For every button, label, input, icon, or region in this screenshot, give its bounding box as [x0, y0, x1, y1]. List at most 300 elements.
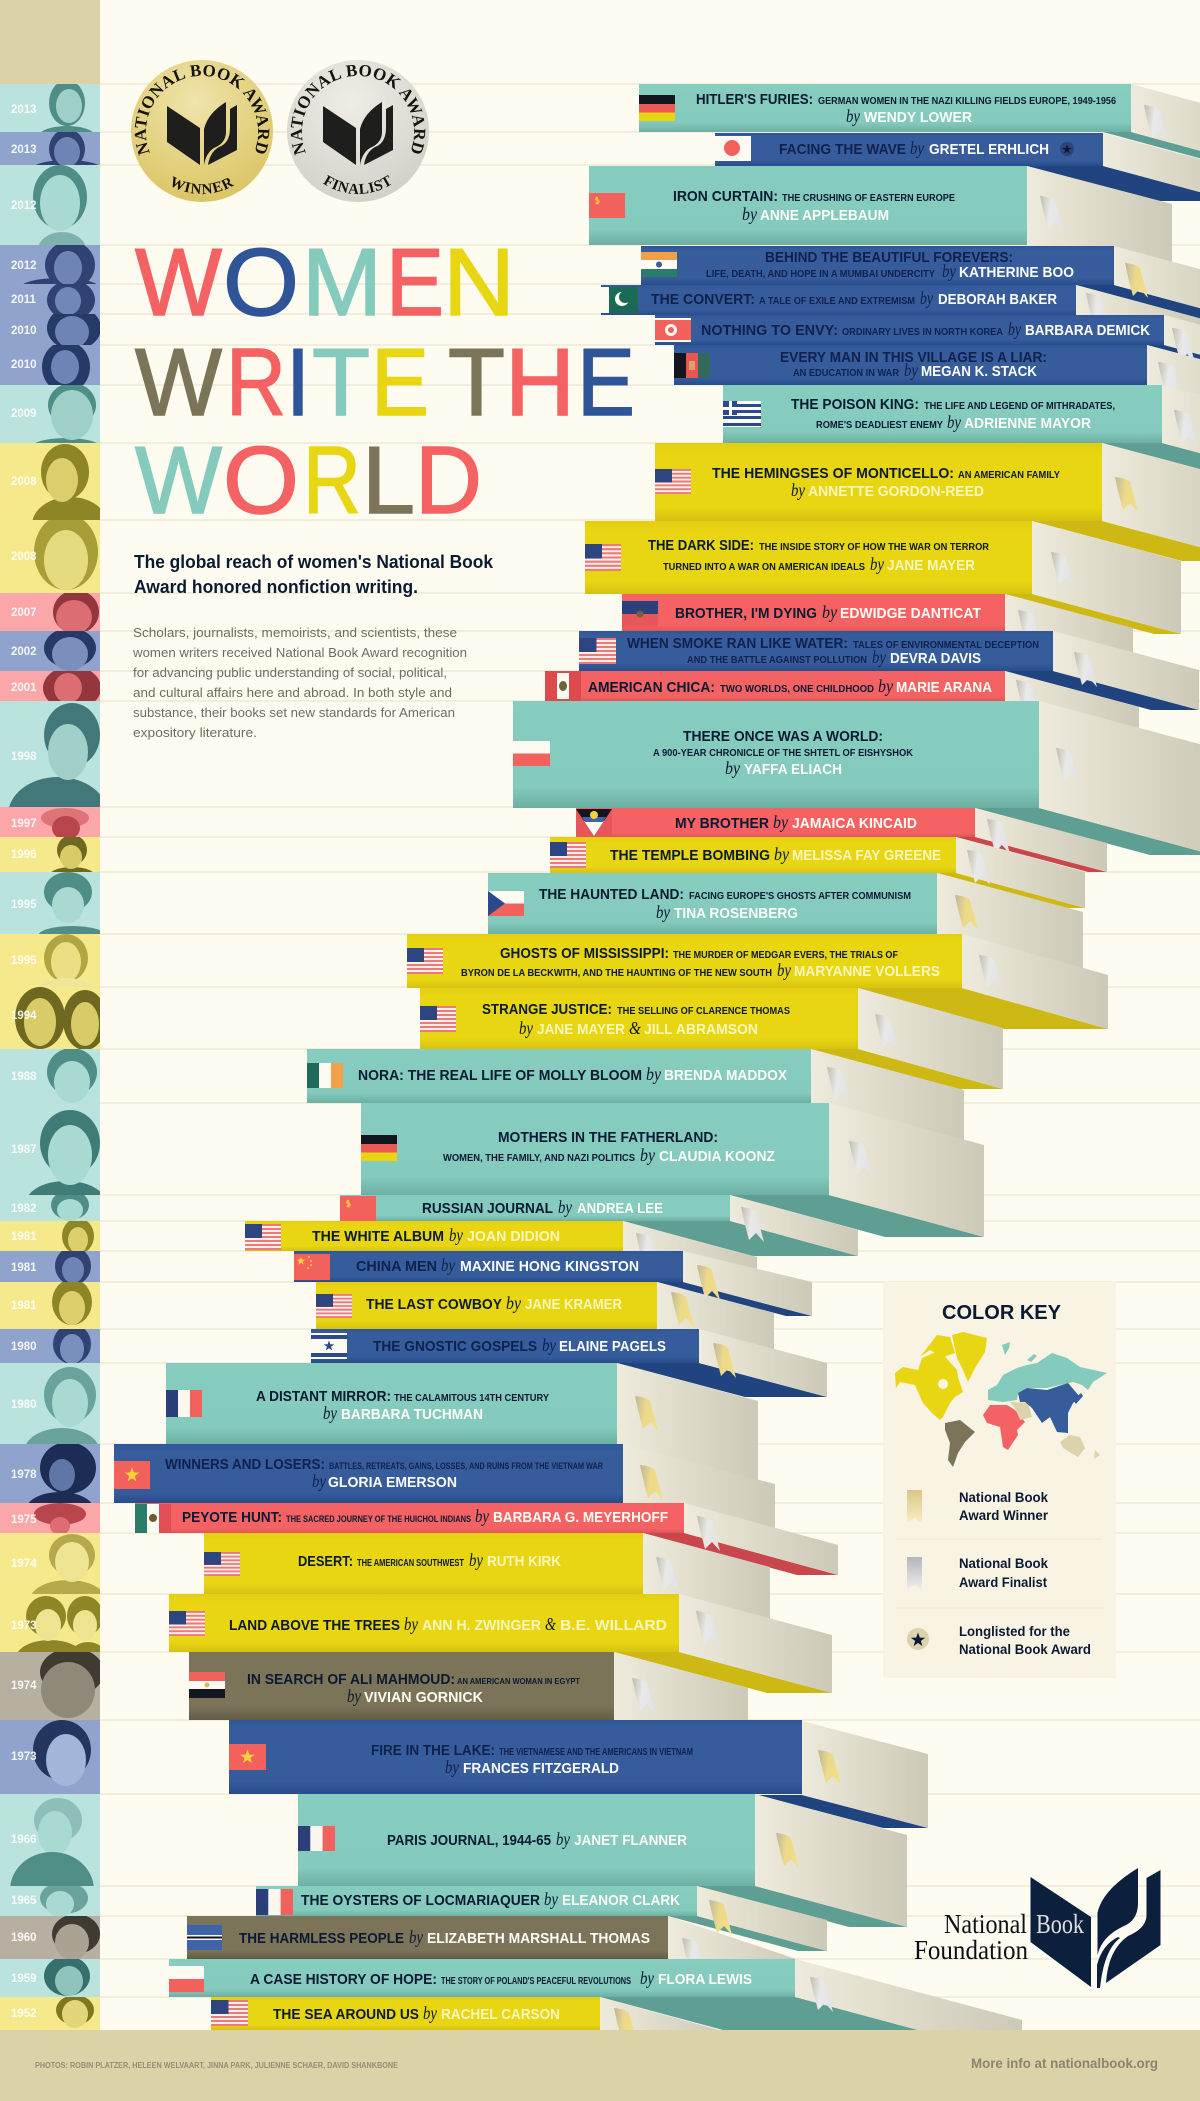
spine text: by — [774, 844, 789, 864]
book: In Search of Ali Mahmoud — [189, 1652, 748, 1756]
flag: USA — [585, 544, 621, 571]
flag: USA — [316, 1294, 352, 1318]
spine text: BYRON DE LA BECKWITH, AND THE HAUNTING OF THE NEW SOUTH — [461, 967, 772, 979]
spine text: B.E. WILLARD — [560, 1617, 667, 1634]
spine text — [239, 1927, 650, 1947]
spine text: THE LIFE AND LEGEND OF MITHRADATES, — [924, 400, 1115, 412]
intro paragraph: substance, their books set new standards for American — [133, 705, 455, 720]
spine text: by — [449, 1225, 463, 1245]
year labels: 1995 — [11, 899, 37, 911]
flag: Afghanistan — [674, 353, 710, 378]
title: Women Write the World: N — [443, 229, 515, 336]
intro paragraph: and cultural affairs here and abroad. In both style and — [133, 685, 452, 700]
flag: Mexico — [135, 1504, 171, 1533]
spine text: THE DARK SIDE: — [648, 537, 754, 554]
logo wordmark: National — [944, 1909, 1027, 1939]
year labels: 2008 — [11, 476, 37, 488]
year labels: 2012 — [11, 200, 37, 212]
spine text: JAMAICA KINCAID — [792, 815, 917, 832]
book: The Temple Bombing — [550, 837, 1085, 908]
spine text: by — [469, 1550, 483, 1570]
spine text: by — [920, 288, 933, 308]
spine text: WENDY LOWER — [864, 109, 972, 126]
flag: USA — [420, 1006, 456, 1032]
book: Peyote Hunt — [135, 1503, 838, 1575]
spine text: JANE MAYER — [887, 557, 975, 574]
portrait row: 1996 Melissa Fay Greene — [0, 837, 100, 872]
spine text: AND THE BATTLE AGAINST POLLUTION — [687, 654, 867, 666]
spine text — [780, 349, 1047, 380]
spine text: TINA ROSENBERG — [674, 905, 798, 922]
flag: Israel — [311, 1333, 347, 1359]
year labels: 1973 — [11, 1751, 37, 1763]
spine text: BARBARA TUCHMAN — [341, 1406, 483, 1423]
year labels: 1978 — [11, 1469, 37, 1481]
spine text: by — [640, 1145, 655, 1165]
flag: France — [256, 1889, 293, 1915]
book: The Convert — [601, 285, 1200, 350]
spine text: by — [822, 602, 837, 622]
spine text: RUSSIAN JOURNAL — [422, 1200, 553, 1217]
spine text: ORDINARY LIVES IN NORTH KOREA — [842, 326, 1003, 338]
book: Paris Journal — [298, 1794, 907, 1927]
spine text: FRANCES FITZGERALD — [463, 1760, 619, 1777]
spine text: THE SELLING OF CLARENCE THOMAS — [617, 1005, 790, 1017]
spine text: THE SEA AROUND US — [273, 2006, 419, 2023]
flag: Pakistan — [601, 287, 638, 313]
year labels — [11, 104, 37, 2020]
year labels: 1973 — [11, 1620, 37, 1632]
book: Strange Justice — [420, 988, 1003, 1089]
logo: National Book Foundation — [914, 1868, 1160, 1988]
portrait row: 1995 Tina Rosenberg — [0, 872, 100, 934]
book: Land Above the Trees — [169, 1594, 832, 1693]
spine text — [648, 537, 989, 574]
spine text: GLORIA EMERSON — [328, 1474, 457, 1491]
portrait row: 2013 Wendy Lower — [0, 84, 100, 132]
book: Nora — [307, 1049, 964, 1144]
spine text — [627, 635, 1039, 667]
title: Women Write the World: E — [577, 329, 635, 436]
key: finalist label: National Book — [959, 1556, 1048, 1571]
spine text: YAFFA ELIACH — [744, 761, 842, 778]
spine text: by — [404, 1614, 418, 1634]
spine text — [301, 1889, 680, 1909]
flag: USA — [245, 1224, 281, 1250]
portrait row: 2001 Marie Arana — [0, 671, 100, 701]
spine text: EDWIDGE DANTICAT — [840, 605, 981, 622]
spine text: DESERT: — [298, 1553, 353, 1570]
key: winner ribbon — [907, 1490, 922, 1523]
title: Women Write the World: W — [135, 427, 222, 534]
year labels: 1974 — [11, 1558, 37, 1570]
spine text: THE SACRED JOURNEY OF THE HUICHOL INDIANS — [286, 1514, 471, 1525]
spine text: THE CONVERT: — [651, 291, 755, 308]
spine text: KATHERINE BOO — [959, 264, 1074, 281]
spine text: JANET FLANNER — [574, 1832, 687, 1849]
flag: Czech Republic — [488, 891, 524, 916]
spine text: VIVIAN GORNICK — [364, 1689, 483, 1706]
portrait row: 2013 Gretel Ehrlich — [0, 132, 100, 165]
book: The Last Cowboy — [316, 1282, 774, 1360]
spine text: by — [441, 1255, 455, 1275]
spine text: MARIE ARANA — [896, 679, 992, 696]
spine text: by — [910, 138, 924, 158]
book: Winners and Losers — [114, 1444, 775, 1543]
portrait row: 1966 Janet Flanner — [0, 1794, 100, 1886]
title: Women Write the World: I — [286, 329, 310, 436]
book: The Haunted Land — [488, 873, 1083, 973]
book: China Men — [294, 1251, 812, 1316]
website link text: More info at nationalbook.org — [971, 2055, 1158, 2071]
spine text: by — [409, 1927, 423, 1947]
flag: USA — [550, 842, 586, 868]
book: American Chica — [545, 671, 1139, 737]
spine text: A DISTANT MIRROR: — [256, 1388, 391, 1405]
seal: National Book Award Winner: NATIONAL BOOK AWARD — [134, 65, 270, 156]
spine text: MARYANNE VOLLERS — [794, 963, 940, 980]
spine text: by — [791, 480, 805, 500]
world map — [895, 1332, 1107, 1467]
flag: Poland — [169, 1966, 204, 1992]
flag: USA — [579, 638, 616, 664]
book: The Gnostic Gospels — [311, 1329, 827, 1397]
spine text: RUTH KIRK — [487, 1553, 561, 1570]
year labels: 2010 — [11, 325, 37, 337]
flag: USSR — [340, 1196, 376, 1221]
year labels: 2013 — [11, 104, 37, 116]
spine text: by — [773, 812, 788, 832]
intro paragraph: expository literature. — [133, 725, 257, 740]
title: Women Write the World: W — [135, 229, 222, 336]
year labels: 1982 — [11, 1203, 37, 1215]
portrait row: 1974 Ruth Kirk — [0, 1533, 100, 1594]
spine text: THE GNOSTIC GOSPELS — [373, 1338, 537, 1355]
flag: North Korea — [655, 318, 691, 342]
flag: Botswana — [187, 1925, 222, 1950]
portrait row: 1994 Jane Mayer and Jill Abramson — [0, 987, 100, 1049]
spine text: GERMAN WOMEN IN THE NAZI KILLING FIELDS EUROPE, 1949-1956 — [818, 95, 1116, 107]
spine text: FIRE IN THE LAKE: — [371, 1742, 495, 1759]
subtitle: The global reach of women's National Book — [134, 552, 494, 572]
portrait row: 1981 Jane Kramer — [0, 1282, 100, 1329]
spine text — [673, 188, 955, 224]
spine text: GRETEL ERHLICH — [929, 141, 1049, 158]
flag: India — [641, 252, 677, 277]
intro paragraph: women writers received National Book Award recognition — [132, 645, 467, 660]
spine text — [358, 1064, 787, 1084]
spine text: MAXINE HONG KINGSTON — [460, 1258, 639, 1275]
spine text: THE HARMLESS PEOPLE — [239, 1930, 404, 1947]
book: Russian Journal — [340, 1195, 858, 1256]
spine text — [366, 1293, 622, 1313]
spine text: FLORA LEWIS — [658, 1971, 752, 1988]
portrait row: 2010 Megan Stack — [0, 345, 100, 385]
spine text — [539, 886, 911, 922]
flag: USA — [211, 2000, 248, 2026]
spine text — [356, 1255, 639, 1275]
spine text: BARBARA DEMICK — [1025, 322, 1150, 339]
spine text: RACHEL CARSON — [441, 2006, 560, 2023]
year labels: 1966 — [11, 1834, 37, 1846]
flag: France — [298, 1826, 335, 1851]
spine text — [701, 319, 1150, 339]
spine text: by — [656, 902, 670, 922]
portrait row: 1960 Elizabeth Marshall Thomas — [0, 1916, 100, 1959]
seal: National Book Award Finalist: FINALIST — [322, 174, 391, 194]
spine text: by — [347, 1686, 361, 1706]
year labels: 1974 — [11, 1680, 37, 1692]
spine text: by — [777, 960, 791, 980]
spine text: by — [640, 1968, 654, 1988]
flag: USA — [655, 469, 691, 494]
year labels: 1998 — [11, 751, 37, 763]
spine text: by — [742, 204, 757, 224]
year labels: 2010 — [11, 359, 37, 371]
spine text: THE TEMPLE BOMBING — [610, 847, 770, 864]
spine text: THE OYSTERS OF LOCMARIAQUER — [301, 1892, 540, 1909]
spine text: by — [1008, 319, 1021, 339]
spine text: LAND ABOVE THE TREES — [229, 1617, 400, 1634]
spine text: IRON CURTAIN: — [673, 188, 778, 205]
spine text: BATTLES, RETREATS, GAINS, LOSSES, AND RUINS FROM THE VIETNAM WAR — [329, 1461, 603, 1471]
spine text: DEVRA DAVIS — [890, 650, 981, 667]
book: Brother, I'm Dying — [622, 594, 1133, 665]
book: When Smoke Ran Like Water — [579, 631, 1199, 710]
spine text: by — [558, 1197, 572, 1217]
portrait row: 1988 Brenda Maddox — [0, 1049, 100, 1103]
book: The Dark Side — [585, 521, 1181, 634]
book: Hitler's Furies — [639, 84, 1200, 170]
spine text — [696, 91, 1116, 126]
year labels: 1995 — [11, 955, 37, 967]
spine text: ROME'S DEADLIEST ENEMY — [816, 419, 943, 431]
spine text: BEHIND THE BEAUTIFUL FOREVERS: — [765, 249, 1013, 266]
spine text — [791, 396, 1115, 432]
year labels: 1994 — [11, 1010, 37, 1022]
spine text: & — [545, 1614, 556, 1634]
book: Iron Curtain — [589, 166, 1172, 283]
spine text: IN SEARCH OF ALI MAHMOUD: — [247, 1671, 455, 1688]
book: The Harmless People — [187, 1916, 805, 2000]
spine text: LIFE, DEATH, AND HOPE IN A MUMBAI UNDERCITY — [706, 268, 935, 280]
spine text: FACING EUROPE'S GHOSTS AFTER COMMUNISM — [689, 890, 911, 902]
spine text: CLAUDIA KOONZ — [659, 1148, 775, 1165]
year labels: 2001 — [11, 682, 37, 694]
spine text: & — [629, 1018, 641, 1038]
logo wordmark: Book — [1036, 1909, 1084, 1939]
year labels: 1980 — [11, 1399, 37, 1411]
intro paragraph: Scholars, journalists, memoirists, and scientists, these — [133, 625, 457, 640]
spine text: MEGAN K. STACK — [921, 363, 1037, 380]
portrait row: 1995 Maryanne Vollers — [0, 934, 100, 987]
spine text: by — [506, 1293, 521, 1313]
spine text: PARIS JOURNAL, 1944-65 — [387, 1832, 551, 1849]
title: Women Write the World: H — [505, 329, 575, 436]
spine text: by — [423, 2003, 437, 2023]
spine text: EVERY MAN IN THIS VILLAGE IS A LIAR: — [780, 349, 1047, 366]
spine text — [312, 1225, 560, 1245]
spine text: A TALE OF EXILE AND EXTREMISM — [759, 295, 915, 307]
year labels: 1975 — [11, 1514, 37, 1526]
title: Women Write the World: E — [386, 229, 444, 336]
spine text: THE STORY OF POLAND'S PEACEFUL REVOLUTIONS — [441, 1975, 631, 1987]
spine text: by — [544, 1889, 558, 1909]
flag: USA — [169, 1611, 205, 1636]
portrait row: 1981 Joan Didion — [0, 1221, 100, 1251]
flag: Peru — [545, 671, 581, 701]
subtitle: Award honored nonfiction writing. — [134, 577, 418, 597]
subtitle — [134, 552, 494, 597]
spine text: MY BROTHER — [675, 815, 769, 832]
spine text: JILL ABRAMSON — [644, 1021, 758, 1038]
spine text: THE CALAMITOUS 14TH CENTURY — [394, 1392, 549, 1404]
year labels: 1981 — [11, 1300, 37, 1312]
portrait row: 1973 Frances Fitzgerald — [0, 1720, 100, 1794]
portrait row: 1980 Elaine Pagels — [0, 1329, 100, 1363]
portrait row: 2009 Adrienne Mayor — [0, 385, 100, 443]
spine text: THE LAST COWBOY — [366, 1296, 502, 1313]
book: The White Album — [245, 1221, 757, 1287]
footer band — [0, 2030, 1200, 2101]
spine text: by — [870, 554, 884, 574]
spine text: AMERICAN CHICA: — [588, 679, 715, 696]
portrait row: 1981 Maxine Hong Kingston — [0, 1251, 100, 1282]
portrait row: 1973 Ann Zwinger and Beatrice Willard — [0, 1594, 100, 1652]
spine text: THE INSIDE STORY OF HOW THE WAR ON TERROR — [759, 541, 989, 553]
title: Women Write the World — [135, 229, 635, 534]
spine text: ANN H. ZWINGER — [422, 1617, 541, 1634]
spine text: JANE MAYER — [537, 1021, 625, 1038]
spine text: A CASE HISTORY OF HOPE: — [250, 1971, 437, 1988]
title: Women Write the World: M — [302, 229, 382, 336]
book: The Oysters of Locmariaquer — [256, 1886, 827, 1951]
spine text — [165, 1456, 603, 1491]
portrait row: 2008 Annette Gordon-Reed — [0, 443, 100, 520]
book: A Distant Mirror — [166, 1363, 758, 1482]
spine text: WINNERS AND LOSERS: — [165, 1456, 325, 1473]
year labels: 1996 — [11, 849, 37, 861]
portrait row: 2012 Anne Applebaum — [0, 165, 100, 245]
book: Mothers in the Fatherland — [361, 1103, 984, 1237]
flag: Vietnam — [229, 1744, 266, 1770]
year labels: 2007 — [11, 607, 37, 619]
year labels: 1980 — [11, 1341, 37, 1353]
key: longlist label — [959, 1624, 1091, 1657]
portrait row: 1959 Flora Lewis — [0, 1959, 100, 1997]
photo and year column — [0, 80, 108, 2030]
title: Women Write the World: T — [312, 329, 370, 436]
key: longlist star — [907, 1628, 929, 1650]
spine text: by — [725, 758, 740, 778]
spine text: WHEN SMOKE RAN LIKE WATER: — [627, 635, 848, 652]
spine text — [653, 728, 913, 778]
book: Facing the Wave — [715, 133, 1200, 201]
spine text: MOTHERS IN THE FATHERLAND: — [498, 1129, 718, 1146]
book: My Brother — [576, 808, 1107, 872]
spine text: by — [904, 360, 918, 380]
year labels: 2013 — [11, 144, 37, 156]
spine text: BARBARA G. MEYERHOFF — [493, 1509, 668, 1526]
panel: color key — [883, 1282, 1116, 1678]
title: Women Write the World: O — [223, 229, 299, 336]
spine text — [247, 1671, 581, 1706]
spine text: THE HEMINGSES OF MONTICELLO: — [712, 465, 954, 482]
year labels: 2008 — [11, 551, 37, 563]
flag: China — [294, 1254, 330, 1280]
year labels: 1959 — [11, 1973, 37, 1985]
portrait row: 1998 Yaffa Eliach — [0, 701, 100, 807]
spine text: ANNETTE GORDON-REED — [808, 483, 984, 500]
spine text — [373, 1335, 666, 1355]
spine text: by — [942, 261, 956, 281]
spine text: by — [878, 676, 893, 696]
flag: Poland — [513, 741, 550, 766]
spine text: TALES OF ENVIRONMENTAL DECEPTION — [853, 639, 1039, 651]
spine text: BRENDA MADDOX — [664, 1067, 787, 1084]
spine text — [706, 249, 1074, 281]
title: Women Write the World: T — [448, 329, 505, 436]
spine text: ELEANOR CLARK — [562, 1892, 680, 1909]
intro paragraph — [132, 625, 467, 740]
spine text: THE MURDER OF MEDGAR EVERS, THE TRIALS OF — [673, 949, 898, 961]
logo wordmark: Foundation — [914, 1935, 1028, 1965]
portrait row: 1982 Andrea Lee — [0, 1195, 100, 1221]
spine text: PEYOTE HUNT: — [182, 1509, 282, 1526]
color key heading: COLOR KEY — [942, 1302, 1062, 1324]
portrait row: 1974 Vivian Gornick — [0, 1652, 100, 1720]
book: Ghosts of Mississippi — [407, 934, 1108, 1029]
spine text: by — [312, 1471, 326, 1491]
book: Fire in the Lake — [229, 1720, 928, 1828]
key: winner label — [959, 1490, 1049, 1523]
book: Behind the Beautiful Forevers — [641, 246, 1200, 320]
spine text: by — [323, 1403, 337, 1423]
flag: USA — [204, 1552, 240, 1576]
flag: Ireland — [307, 1063, 343, 1088]
spine text: ADRIENNE MAYOR — [964, 415, 1091, 432]
flag: Haiti — [622, 601, 658, 627]
flag: Japan — [715, 136, 751, 161]
spine text — [588, 676, 992, 696]
spine text: JOAN DIDION — [467, 1228, 560, 1245]
spine text: by — [846, 106, 860, 126]
key: longlist label: Longlisted for the — [959, 1624, 1070, 1639]
spine text: THE AMERICAN SOUTHWEST — [357, 1557, 464, 1569]
spine text: TURNED INTO A WAR ON AMERICAN IDEALS — [663, 561, 865, 573]
seal: National Book Award Finalist — [287, 60, 429, 202]
year labels: 2009 — [11, 408, 37, 420]
book: A Case History of Hope — [169, 1959, 1022, 2058]
portrait row: 2008 Jane Mayer — [0, 520, 100, 593]
spine text — [422, 1197, 663, 1217]
header band of photo column — [0, 0, 100, 84]
spine text: by — [519, 1018, 533, 1038]
flag: USSR — [589, 193, 625, 218]
book: Nothing to Envy — [655, 315, 1200, 377]
flag: Germany — [639, 95, 675, 121]
logo wordmark — [914, 1909, 1084, 1965]
spine text: NOTHING TO ENVY: — [701, 322, 838, 339]
spine text: AN AMERICAN WOMAN IN EGYPT — [457, 1676, 581, 1686]
spine text: THE POISON KING: — [791, 396, 919, 413]
seal: National Book Award Finalist: NATIONAL BOOK AWARD — [290, 65, 426, 156]
year labels: 1981 — [11, 1262, 37, 1274]
key: finalist label — [959, 1556, 1048, 1590]
spine text — [443, 1129, 775, 1165]
spine text: STRANGE JUSTICE: — [482, 1001, 612, 1018]
flag: USA — [407, 948, 443, 974]
